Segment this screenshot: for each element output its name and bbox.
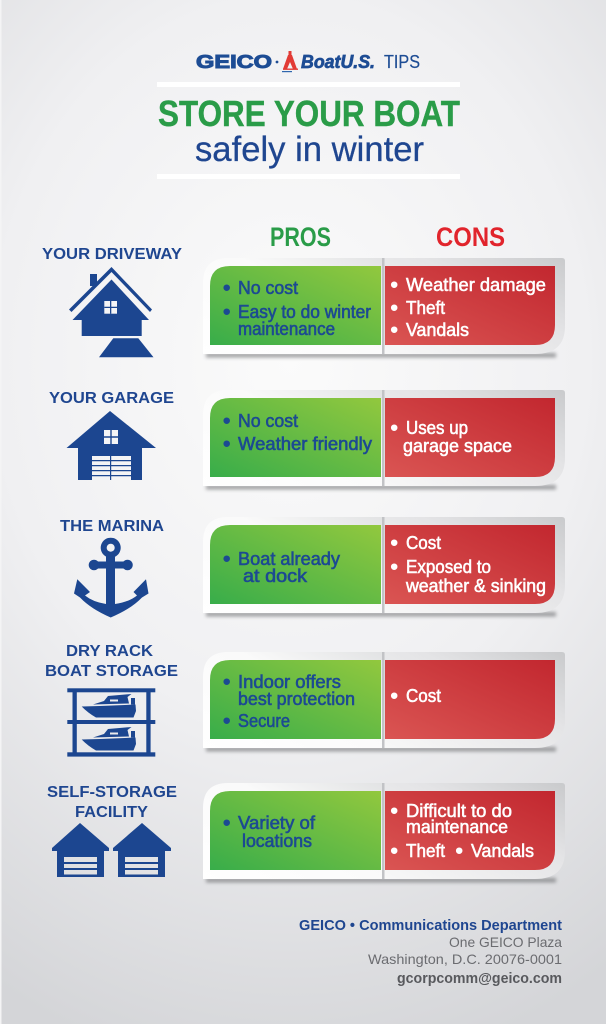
cons panel: Exposed to xyxy=(406,557,491,577)
pros panel xyxy=(210,525,381,604)
cons panel: Difficult to do xyxy=(406,801,512,821)
panel shadow xyxy=(206,878,556,882)
cons panel: • xyxy=(390,295,398,322)
cons panel xyxy=(385,398,555,477)
pros panel: • xyxy=(222,275,231,302)
label xyxy=(45,643,178,680)
pros panel: locations xyxy=(242,831,312,851)
cons panel xyxy=(385,525,555,604)
cons panel: • xyxy=(390,272,398,299)
cons panel: • xyxy=(390,838,398,865)
cons panel: • xyxy=(390,554,398,581)
label: THE MARINA xyxy=(60,518,164,535)
cons panel: • xyxy=(390,530,398,557)
label: FACILITY xyxy=(75,804,148,821)
column heading: cons: CONS xyxy=(436,222,505,252)
label: YOUR DRIVEWAY xyxy=(42,246,182,263)
pros panel xyxy=(210,266,381,345)
pros panel: at dock xyxy=(243,566,308,586)
pros panel: Boat already xyxy=(238,549,340,569)
panel frame xyxy=(203,783,565,879)
icon: storage units xyxy=(52,823,171,877)
pros panel: No cost xyxy=(238,278,298,298)
TIPS: TIPS xyxy=(384,52,420,72)
cons panel: Vandals xyxy=(406,320,469,340)
column heading: pros: PROS xyxy=(270,222,331,252)
address line 1: One GEICO Plaza xyxy=(449,934,562,950)
cons panel xyxy=(385,266,555,345)
row 4: dry rack boat storage xyxy=(45,643,565,757)
panel frame xyxy=(203,258,565,354)
panel frame xyxy=(203,390,565,486)
pros panel: • xyxy=(222,669,231,696)
icon: house with driveway xyxy=(69,267,154,357)
cons panel: maintenance xyxy=(406,817,508,837)
cons panel xyxy=(385,660,555,739)
cons panel: Uses up xyxy=(406,418,468,438)
icon: boat rack xyxy=(67,688,155,757)
cons panel: Weather damage xyxy=(406,275,546,295)
cons panel: garage space xyxy=(403,436,512,456)
cons panel: • xyxy=(455,838,463,865)
cons panel: • xyxy=(390,415,398,442)
row 3: the marina xyxy=(60,517,565,618)
cons panel: Cost xyxy=(406,533,441,553)
panel shadow xyxy=(206,747,556,752)
BoatUS buoy icon xyxy=(282,51,298,72)
header logos xyxy=(196,51,420,72)
pros panel xyxy=(210,398,381,477)
pros panel: Easy to do winter xyxy=(238,302,371,322)
title line 1: STORE YOUR BOAT xyxy=(158,93,460,134)
label xyxy=(47,784,177,821)
title line 2: safely in winter xyxy=(195,130,424,169)
label: YOUR GARAGE xyxy=(49,390,174,407)
pros panel: • xyxy=(222,408,231,435)
pros panel: best protection xyxy=(238,689,355,709)
cons panel: Theft xyxy=(406,298,445,318)
panel frame xyxy=(203,517,565,613)
pros panel xyxy=(210,791,381,870)
BoatUS logo: BoatU.S. xyxy=(301,52,375,72)
title block xyxy=(157,82,460,179)
pros panel: Secure xyxy=(238,711,290,731)
cons panel: Theft xyxy=(406,841,445,861)
pros panel: • xyxy=(222,299,231,326)
cons panel: Cost xyxy=(406,686,441,706)
cons panel: • xyxy=(390,798,398,825)
panel shadow xyxy=(206,612,556,616)
pros panel: • xyxy=(222,546,231,573)
department: GEICO • Communications Department xyxy=(299,917,562,934)
icon: house with garage xyxy=(66,411,156,480)
pros panel: • xyxy=(222,708,231,735)
email: gcorpcomm@geico.com xyxy=(397,970,562,987)
footer contact block xyxy=(299,917,562,987)
icon: anchor xyxy=(74,538,148,618)
row 2: your garage xyxy=(49,390,565,490)
pros panel: Variety of xyxy=(238,813,316,833)
panel frame xyxy=(203,652,565,748)
pros panel: Indoor offers xyxy=(238,672,341,692)
pros panel: • xyxy=(222,431,231,458)
pros panel: • xyxy=(222,810,231,837)
pros panel: maintenance xyxy=(238,319,335,339)
pros panel xyxy=(210,660,381,739)
label: BOAT STORAGE xyxy=(45,663,178,680)
pros panel: Weather friendly xyxy=(238,434,372,454)
panel shadow xyxy=(206,353,556,358)
cons panel: • xyxy=(390,683,398,710)
cons panel: weather & sinking xyxy=(405,576,546,596)
cons panel: Vandals xyxy=(471,841,534,861)
row 1: your driveway xyxy=(42,246,565,358)
address line 2: Washington, D.C. 20076-0001 xyxy=(368,951,562,967)
label: DRY RACK xyxy=(66,643,153,660)
pros panel: No cost xyxy=(238,411,298,431)
panel shadow xyxy=(206,485,556,490)
GEICO logo: GEICO xyxy=(196,52,272,72)
cons panel xyxy=(385,791,555,870)
cons panel: • xyxy=(390,317,398,344)
separator dot xyxy=(276,61,278,63)
row 5: self-storage facility xyxy=(47,783,565,882)
label: SELF-STORAGE xyxy=(47,784,177,801)
